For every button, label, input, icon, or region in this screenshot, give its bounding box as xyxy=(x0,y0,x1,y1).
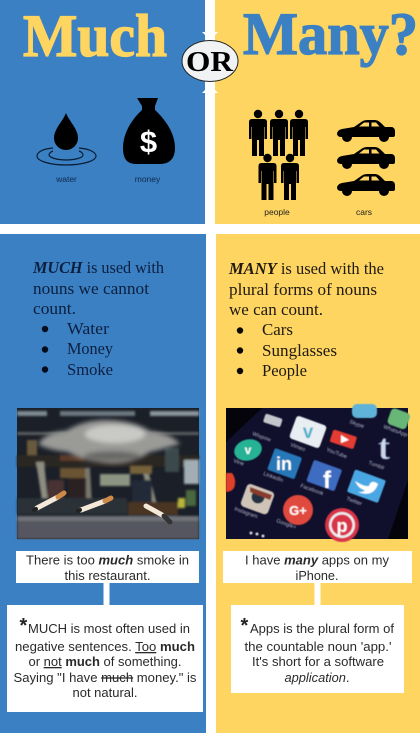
text block: much rule: MUCH is used with xyxy=(32,258,165,277)
caption box: much: this restaurant. xyxy=(64,568,150,583)
note box: much: Saying "I have much money." is xyxy=(14,670,197,685)
connector: many xyxy=(314,583,320,605)
text block: much rule: nouns we cannot xyxy=(33,279,149,298)
app name labels: Facebook xyxy=(299,483,324,497)
app name labels: Instagram xyxy=(233,506,259,520)
badge: OR: OR xyxy=(186,47,234,78)
photo: phone apps: v xyxy=(303,422,314,443)
text block: many rule: MANY is used with the xyxy=(228,259,384,278)
app name labels: Wispow xyxy=(251,431,271,443)
photo: phone apps xyxy=(226,404,411,542)
note box: many: Apps is the plural form of xyxy=(250,621,394,636)
label: people: people xyxy=(264,207,290,217)
text block: much rule: count. xyxy=(33,299,76,318)
app name labels: Vimeo xyxy=(289,442,306,453)
cigarettes xyxy=(34,493,170,522)
panel: blue background top xyxy=(0,0,205,224)
note box: many xyxy=(231,605,404,693)
photo: phone apps: v xyxy=(245,443,252,457)
app name labels: WhatsApp xyxy=(382,424,408,439)
text block: many rule: Sunglasses xyxy=(262,341,337,360)
note box: many: It's short for a software xyxy=(252,654,384,669)
icon: water drop xyxy=(37,113,96,165)
text block: much rule: Smoke xyxy=(67,360,113,379)
arrow: down to OR xyxy=(202,32,218,40)
photo: phone apps: t xyxy=(378,427,390,467)
app name labels: LinkedIn xyxy=(262,471,284,484)
panel: yellow background top xyxy=(215,0,420,224)
app name labels: Twitter xyxy=(345,496,363,507)
text block: much rule xyxy=(32,258,165,379)
title: Much: Much xyxy=(23,3,167,69)
app name labels: Skype xyxy=(348,419,365,430)
caption box: many: iPhone. xyxy=(296,568,338,583)
photo: phone apps: in xyxy=(276,454,292,474)
note box: much: or not much of something. xyxy=(28,654,182,669)
app name labels: Google+ xyxy=(275,518,297,531)
app name labels: Vine xyxy=(232,458,245,468)
panel: yellow background bottom xyxy=(216,234,420,733)
text block: many rule: Cars xyxy=(262,320,293,339)
smoke cloud xyxy=(38,420,180,464)
caption box: many: I have many apps on my xyxy=(245,552,389,568)
label: cars: cars xyxy=(356,207,372,217)
note box: many: the countable noun 'app.' xyxy=(244,639,392,654)
caption box: much xyxy=(16,551,199,583)
photo: phone apps: G+ xyxy=(289,503,307,518)
note box: much: * xyxy=(20,615,28,637)
app name labels xyxy=(232,419,408,531)
caption box: many xyxy=(223,551,412,583)
label: water: water xyxy=(55,174,77,184)
label: money: money xyxy=(135,174,161,184)
panel: blue background bottom xyxy=(0,234,206,733)
photo: smoky restaurant xyxy=(17,408,199,539)
text block: much rule: Money xyxy=(67,339,114,358)
icon: cars xyxy=(337,120,395,196)
app name labels: Tumblr xyxy=(367,460,385,472)
note box: many: * xyxy=(240,615,248,637)
photo: phone apps: f xyxy=(323,467,332,494)
note box: much: negative sentences. Too much xyxy=(15,639,195,654)
caption box: much: There is too much smoke in xyxy=(26,552,189,568)
note box: much xyxy=(7,605,203,712)
photo: phone apps: p xyxy=(336,516,348,536)
icon: money bag: $ xyxy=(140,124,157,159)
text block: many rule xyxy=(228,259,384,380)
note box: much: MUCH is most often used in xyxy=(28,621,190,636)
note box: many: application. xyxy=(284,670,350,685)
text block: many rule: People xyxy=(262,361,307,380)
note box: much: not natural. xyxy=(72,685,138,700)
text block: many rule: we can count. xyxy=(229,300,323,319)
connector: much xyxy=(104,583,110,605)
app name labels: YouTube xyxy=(325,447,348,460)
text block: much rule: Water xyxy=(67,319,110,338)
badge: OR xyxy=(182,40,238,82)
arrow: up to OR xyxy=(202,85,218,93)
title: Many?: Many? xyxy=(243,1,418,67)
text block: many rule: plural forms of nouns xyxy=(229,280,377,299)
icon: money bag xyxy=(123,98,175,164)
icon: people xyxy=(249,110,308,200)
